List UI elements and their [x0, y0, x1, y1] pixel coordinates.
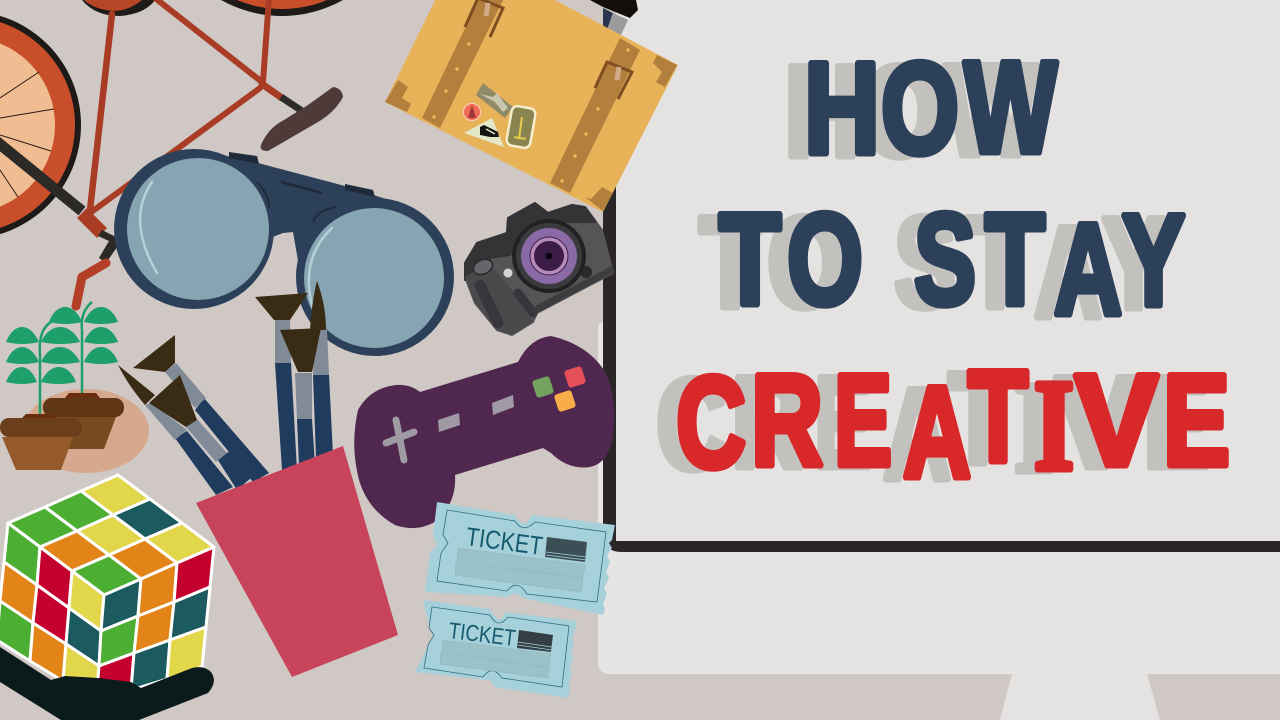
heading: CREATIVE: V [1075, 347, 1158, 493]
heading: TO STAY: T [699, 189, 761, 335]
heading: TO STAY: S [914, 186, 976, 332]
icon: rubik's cube [0, 475, 214, 702]
icon: camera [465, 203, 613, 335]
icon: small ticket [415, 600, 577, 698]
icon: hand holding cube [0, 647, 214, 720]
panel: computer monitor [590, 0, 1280, 720]
heading: HOW: W [944, 37, 1037, 183]
heading: TO STAY: A [1034, 199, 1102, 345]
icon: large ticket [425, 502, 615, 615]
barcode [545, 537, 587, 562]
heading: CREATIVE: V [1055, 349, 1138, 495]
heading: TO STAY: A [1054, 196, 1122, 342]
heading: CREATIVE: I [1034, 354, 1074, 498]
heading: HOW: H [804, 35, 880, 181]
heading: TO STAY: O [767, 189, 843, 335]
heading: CREATIVE: E [1143, 349, 1210, 495]
suitcase stickers [464, 83, 536, 149]
heading: HOW: O [881, 35, 959, 181]
icon: bicycle [0, 0, 406, 306]
heading: CREATIVE: T [948, 345, 1008, 491]
heading: CREATIVE: E [834, 347, 892, 493]
heading: HOW: O [861, 38, 939, 184]
heading: CREATIVE: E [814, 349, 872, 495]
heading: CREATIVE: R [731, 349, 803, 495]
icon: binoculars [114, 149, 454, 356]
icon: suitcase [385, 0, 678, 212]
icon: paint brushes [118, 281, 333, 495]
icon: potted plants [0, 302, 149, 473]
heading: CREATIVE: T [968, 343, 1028, 489]
heading: CREATIVE: C [656, 351, 726, 497]
heading: CREATIVE: E [1163, 347, 1230, 493]
heading: HOW [784, 34, 1057, 184]
heading: CREATIVE [656, 343, 1230, 507]
icon: bicycle saddle [261, 87, 343, 151]
heading: TO STAY [699, 186, 1185, 345]
heading: TO STAY: T [965, 189, 1025, 335]
barcode [517, 630, 553, 652]
heading: CREATIVE: A [903, 359, 971, 505]
heading: TO STAY: Y [1102, 190, 1165, 336]
heading: CREATIVE: I [1014, 356, 1054, 500]
icon: game controller [354, 336, 614, 528]
heading: TO STAY: T [985, 186, 1045, 332]
icon: red cup [196, 446, 398, 677]
icon: large ticket: TICKET [464, 521, 545, 561]
icon: small ticket: TICKET [447, 617, 517, 651]
heading: CREATIVE: R [751, 347, 823, 493]
heading: TO STAY: Y [1122, 187, 1185, 333]
title: how to stay creative [656, 34, 1230, 507]
heading: HOW: H [784, 38, 860, 184]
heading: TO STAY: T [719, 186, 781, 332]
heading: CREATIVE: C [676, 349, 746, 495]
heading: TO STAY: O [787, 186, 863, 332]
heading: TO STAY: S [894, 189, 956, 335]
heading: HOW: W [964, 34, 1057, 180]
heading: CREATIVE: A [883, 361, 951, 507]
